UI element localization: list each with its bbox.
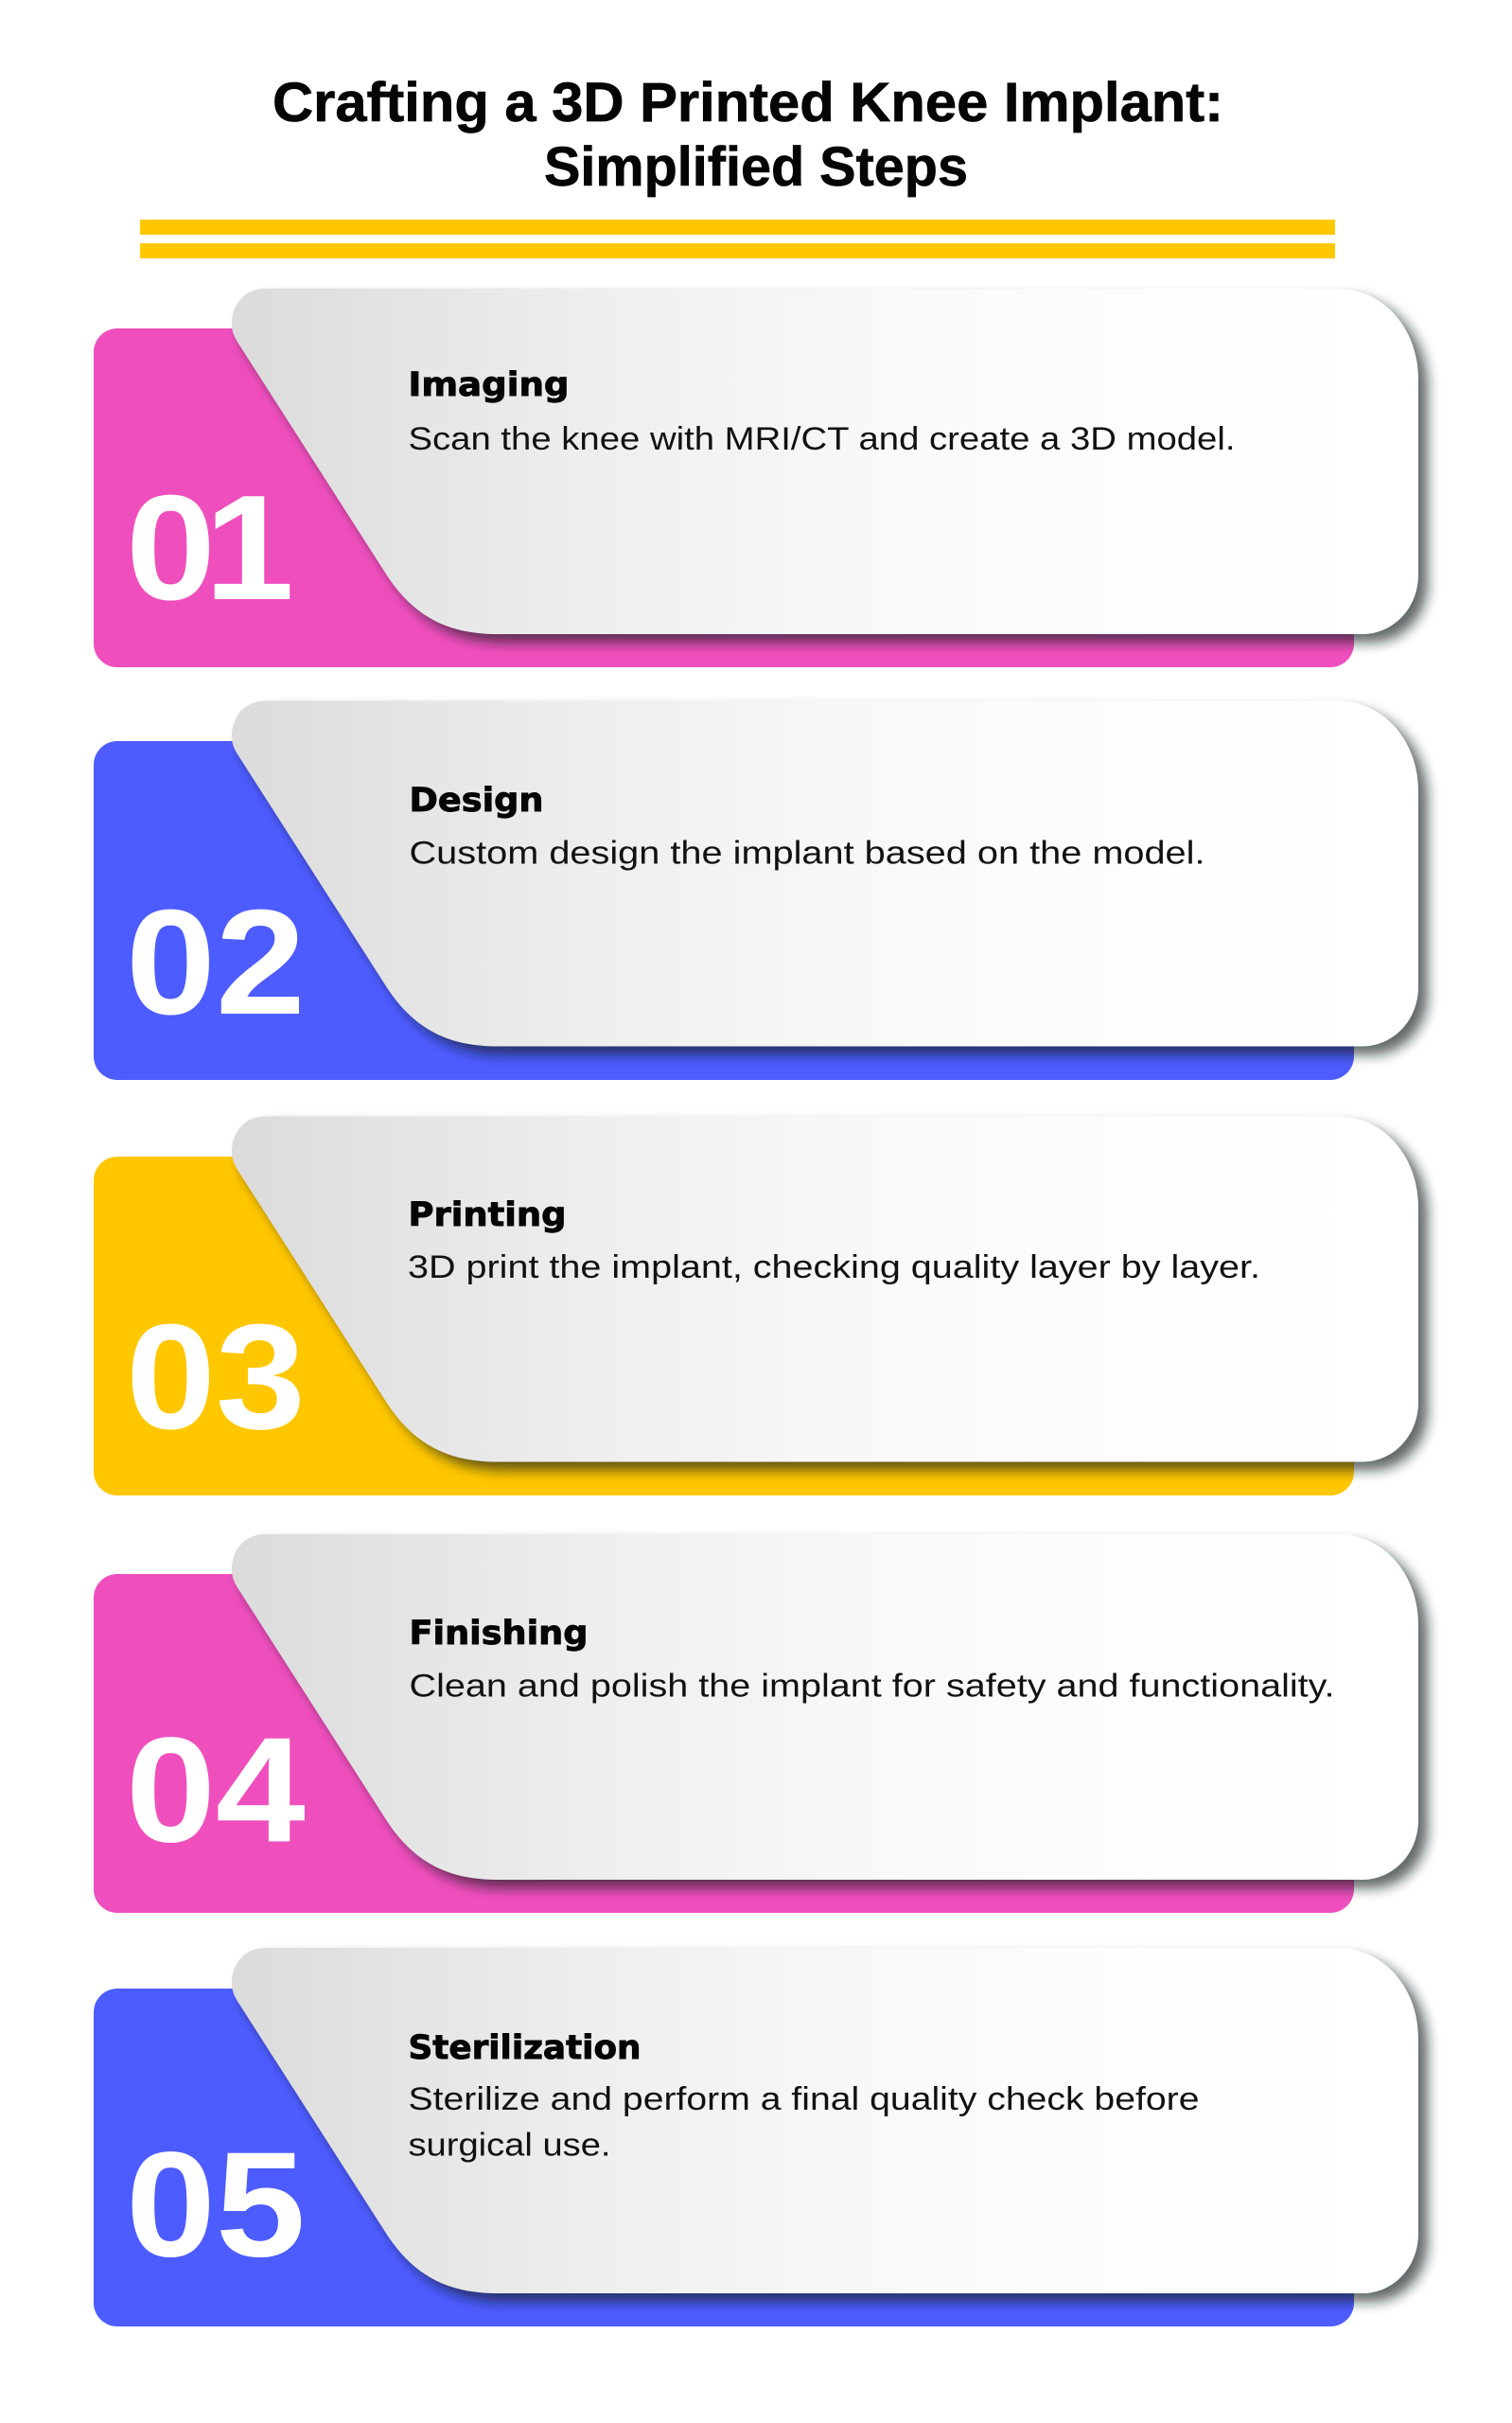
body text: 3D print the implant, checking quality layer by layer. [408, 1249, 1260, 1285]
heading: Sterilization: Sterilization [409, 2029, 642, 2067]
body text: Custom design the implant based on the model. [409, 835, 1205, 871]
number 02: 02 [126, 878, 306, 1046]
panel: step 04 finishing [94, 1534, 1428, 1913]
blue backing panel [94, 1989, 1354, 2326]
white card [232, 289, 1428, 643]
white card [232, 700, 1428, 1054]
heading: Imaging: Imaging [409, 366, 570, 404]
panel: step 02 design [94, 700, 1428, 1080]
blue backing panel [94, 741, 1354, 1080]
number 01: 01 [126, 464, 294, 631]
pink backing panel [94, 328, 1354, 667]
title: Simplified Steps [544, 136, 968, 198]
title [273, 72, 1223, 198]
number 05: 05 [126, 2120, 306, 2288]
panel: step 03 printing [94, 1117, 1428, 1495]
number 04: 04 [126, 1706, 306, 1873]
heading: Printing: Printing [409, 1196, 566, 1234]
title double rule [140, 220, 1335, 258]
title: Crafting a 3D Printed Knee Implant: [273, 72, 1223, 133]
white card [232, 1117, 1428, 1471]
heading: Design: Design [409, 782, 543, 820]
body text: Clean and polish the implant for safety and functionality. [409, 1668, 1334, 1704]
pink backing panel [94, 1574, 1354, 1913]
panel: step 01 imaging [94, 289, 1428, 667]
white card [232, 1534, 1428, 1888]
panel: step 05 sterilization [94, 1948, 1428, 2326]
body text: Sterilize and perform a final quality check before [409, 2081, 1200, 2117]
white card [232, 1948, 1428, 2302]
number 03: 03 [126, 1293, 306, 1460]
yellow backing panel [94, 1157, 1354, 1495]
heading: Finishing: Finishing [409, 1615, 589, 1653]
body text [409, 2081, 1200, 2164]
body text: surgical use. [409, 2128, 611, 2164]
body text: Scan the knee with MRI/CT and create a 3D model. [409, 421, 1236, 457]
